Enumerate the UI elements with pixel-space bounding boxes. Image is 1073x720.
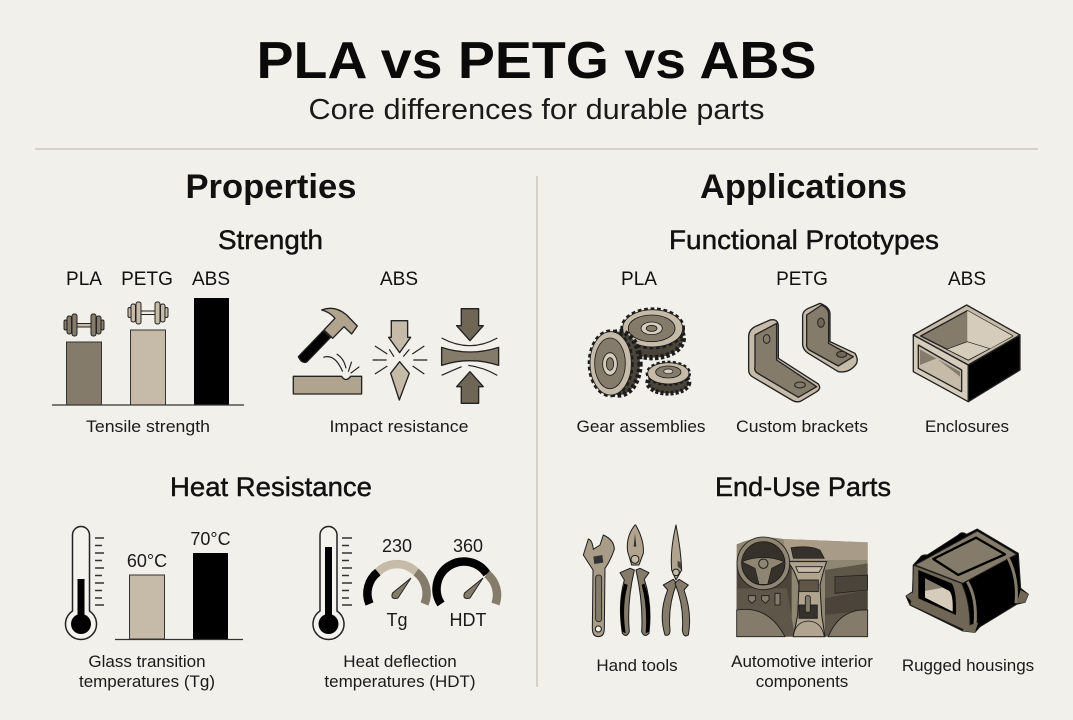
value: 60°C: 60°C bbox=[127, 551, 167, 571]
gauge: HDT 360: HDT bbox=[450, 610, 486, 630]
bar: ABS 70°C bbox=[193, 553, 228, 639]
icon: wrench and pliers bbox=[583, 525, 690, 637]
gear top bbox=[622, 310, 683, 358]
item: PETG custom brackets: PETG bbox=[776, 269, 828, 290]
icon: arrow impact fracture bbox=[373, 321, 427, 400]
wrench bbox=[583, 535, 614, 637]
icon: enclosure bbox=[913, 305, 1020, 402]
icon: compression arrows and deformed block bbox=[442, 309, 499, 403]
item: automotive interior components: Automotive interior bbox=[731, 652, 873, 671]
label: heat deflection temperatures: temperatures (HDT) bbox=[324, 672, 476, 691]
item: hand tools bbox=[583, 525, 690, 675]
gauge: Tg 230 bbox=[367, 536, 427, 630]
label: glass transition temperatures: temperatures (Tg) bbox=[79, 672, 215, 691]
item: PLA gear assemblies bbox=[576, 269, 706, 436]
gear small bbox=[648, 363, 689, 393]
gauge: HDT 360 bbox=[437, 536, 497, 630]
subheading: strength: Strength bbox=[218, 225, 323, 255]
label: heat deflection temperatures: Heat deflection bbox=[343, 652, 457, 671]
icon group: impact resistance bbox=[293, 269, 499, 436]
bar labels: PETG bbox=[121, 269, 173, 290]
item: ABS enclosures: ABS bbox=[948, 269, 986, 290]
bar labels: ABS bbox=[192, 269, 230, 290]
label: impact resistance: Impact resistance bbox=[330, 417, 468, 436]
item: hand tools: Hand tools bbox=[596, 656, 678, 675]
icon: brackets bbox=[749, 303, 857, 402]
panel: applications bbox=[576, 168, 1034, 691]
bar: PLA bbox=[66, 342, 102, 405]
subtitle: Core differences for durable parts bbox=[308, 94, 764, 126]
bar chart: tensile strength bbox=[52, 269, 244, 436]
bar: PETG bbox=[130, 330, 166, 405]
panel: properties bbox=[52, 168, 499, 691]
gauge: HDT 360: 360 bbox=[453, 536, 483, 556]
bar labels: PLA bbox=[66, 269, 102, 290]
title: PLA vs PETG vs ABS bbox=[256, 32, 816, 90]
icon: car interior bbox=[737, 537, 868, 637]
item: automotive interior components bbox=[731, 537, 873, 691]
item: rugged housings bbox=[902, 529, 1034, 675]
label: glass transition temperatures: Glass transition bbox=[88, 652, 206, 671]
item: ABS enclosures: Enclosures bbox=[925, 417, 1009, 436]
chart: glass transition temperatures bbox=[66, 526, 243, 691]
icon: thermometer low bbox=[66, 526, 104, 639]
item: PLA gear assemblies: PLA bbox=[621, 269, 657, 290]
subheading: functional prototypes: Functional Prototypes bbox=[669, 225, 939, 255]
subheading: heat resistance: Heat Resistance bbox=[170, 472, 372, 502]
bar: PETG 60°C bbox=[130, 575, 164, 639]
item: PETG custom brackets: Custom brackets bbox=[736, 417, 868, 436]
item: PLA gear assemblies: Gear assemblies bbox=[576, 417, 706, 436]
item: rugged housings: Rugged housings bbox=[902, 656, 1034, 675]
gauge: Tg 230: Tg bbox=[386, 610, 408, 630]
icon: thermometer high bbox=[313, 526, 352, 639]
label: ABS: ABS bbox=[380, 269, 418, 290]
combination pliers bbox=[620, 525, 650, 635]
item: PETG custom brackets bbox=[736, 269, 868, 436]
icon: hammer striking plate bbox=[293, 308, 362, 394]
item: automotive interior components: components bbox=[756, 672, 848, 691]
icon: gears bbox=[590, 310, 689, 395]
heading: properties: Properties bbox=[186, 168, 356, 206]
needle-nose pliers bbox=[662, 525, 690, 636]
icon: dumbbell PLA bbox=[64, 314, 104, 336]
icon: rugged housing bbox=[906, 529, 1028, 632]
subheading: end-use parts: End-Use Parts bbox=[715, 472, 891, 502]
heading: applications: Applications bbox=[700, 168, 907, 206]
bar labels bbox=[66, 269, 230, 290]
item: ABS enclosures bbox=[913, 269, 1020, 436]
chart: heat deflection temperatures bbox=[313, 526, 497, 691]
gear left bbox=[590, 332, 640, 395]
label: tensile strength: Tensile strength bbox=[86, 417, 210, 436]
icon: dumbbell PETG bbox=[128, 302, 168, 324]
value: 70°C: 70°C bbox=[190, 529, 231, 549]
gauge: Tg 230: 230 bbox=[382, 536, 412, 556]
bar: ABS bbox=[194, 298, 229, 405]
